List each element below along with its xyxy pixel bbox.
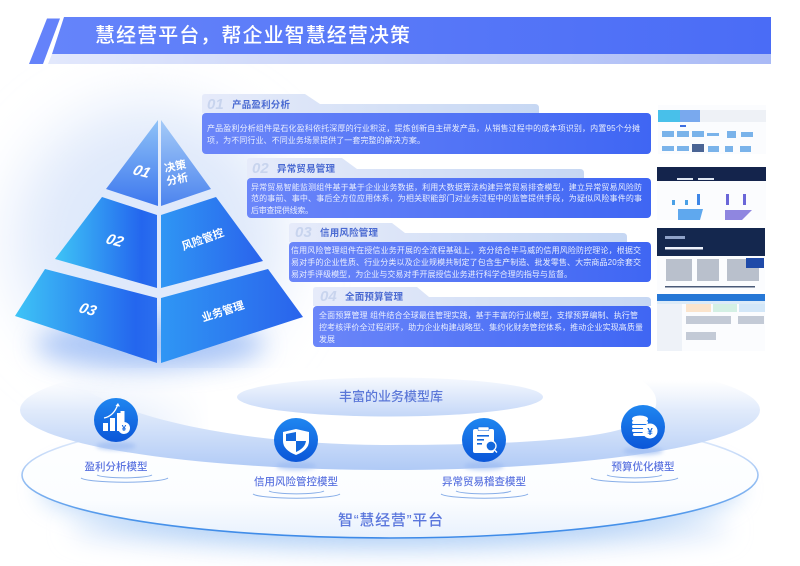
tier labels: 决策 <box>163 157 187 175</box>
panel: 全面预算管理: 04 <box>320 288 337 305</box>
panel: 异常贸易管理: 02 <box>252 160 269 177</box>
top ellipse: model library: 丰富的业务模型库 <box>339 389 443 404</box>
tier labels: 分析 <box>165 170 189 188</box>
screenshot 4 <box>657 294 765 351</box>
title: 慧经营平台，帮企业智慧经营决策 <box>95 24 410 47</box>
label: 预算优化模型: 预算优化模型 <box>612 460 674 473</box>
tier labels: 风险管控 <box>180 225 226 253</box>
label: 信用风险管控模型: 信用风险管控模型 <box>254 475 338 488</box>
panel: 全面预算管理: 全面预算管理 <box>345 291 403 303</box>
panel: 信用风险管理: 易对手评级模型，为企业与交易对手开展授信业务进行科学合理的指导与监督。 <box>291 269 572 279</box>
panel: 产品盈利分析: 项，为不同行业、不同业务场景提供了一套完整的解决方案。 <box>207 135 425 145</box>
icon: shield <box>274 418 318 470</box>
label: 盈利分析模型: 盈利分析模型 <box>84 460 148 473</box>
panel: 信用风险管理: 03 <box>295 224 312 241</box>
label: 预算优化模型 <box>591 460 678 482</box>
screenshot 2 <box>657 167 766 220</box>
panel: 异常贸易管理: 异常贸易管理 <box>277 163 335 175</box>
tier numbers: 02 <box>103 231 127 251</box>
icon: audit report <box>462 418 506 470</box>
panel: 产品盈利分析: 产品盈利分析 <box>232 99 290 111</box>
tier numbers <box>76 162 153 320</box>
upper platform ring <box>20 350 760 470</box>
background glow <box>15 105 730 552</box>
panel: 全面预算管理: 全面预算管理 组件结合全球最佳管理实践，基于丰富的行业模型，支撑预算编制、执行管 <box>319 310 638 320</box>
panel: 信用风险管理 <box>289 223 651 282</box>
label: 异常贸易稽查模型: 异常贸易稽查模型 <box>442 475 526 488</box>
panel: 信用风险管理: 信用风险管理 <box>320 227 378 239</box>
panel: 全面预算管理 <box>313 287 651 347</box>
platform title: 智“慧经营”平台 <box>338 511 443 529</box>
label: 盈利分析模型 <box>81 460 168 482</box>
icon: budget coins: ¥ <box>647 427 653 438</box>
top ellipse: model library <box>237 378 543 416</box>
panel: 产品盈利分析: 01 <box>207 96 224 113</box>
tier labels <box>163 157 246 325</box>
panel: 全面预算管理: 控考核评价全过程闭环，助力企业构建战略型、集约化财务管控体系，推动企业实现高质量 <box>319 322 643 332</box>
tier numbers: 01 <box>130 162 153 182</box>
screenshot 1 <box>658 105 766 154</box>
tier numbers: 03 <box>76 300 100 320</box>
panel: 产品盈利分析 <box>202 94 651 154</box>
lower platform base <box>22 412 758 544</box>
panel: 信用风险管理: 易对手的企业性质、行业分类以及企业规模共制定了包含生产制造、批发零售、大宗商品20余套交 <box>291 257 641 267</box>
label: 异常贸易稽查模型 <box>441 475 528 498</box>
tier labels: 业务管理 <box>200 298 246 325</box>
pyramid <box>15 120 303 369</box>
screenshot 3 <box>657 228 765 290</box>
panel: 异常贸易管理 <box>247 158 651 218</box>
panel: 产品盈利分析: 产品盈利分析组件是石化盈科依托深厚的行业积淀，提炼创新自主研发产品，从销售过程中的成本项识别，内置95个分摊 <box>207 123 640 133</box>
label: 信用风险管控模型 <box>253 475 340 498</box>
panel: 异常贸易管理: 范的事前、事中、事后全方位应用体系，为相关职能部门对业务过程中的监管提供手段，为疑似风险事件的事 <box>251 193 642 203</box>
icon: budget coins <box>621 405 665 455</box>
panel: 异常贸易管理: 后审查提供线索。 <box>251 205 313 215</box>
icon: profit analysis <box>94 398 138 450</box>
icon: profit analysis: ¥ <box>122 424 127 433</box>
header banner <box>29 17 771 64</box>
panel: 信用风险管理: 信用风险管理组件在授信业务开展的全流程基础上，充分结合毕马威的信用风险防控理论，根据交 <box>291 245 641 255</box>
panel: 全面预算管理: 发展 <box>319 334 335 344</box>
panel: 异常贸易管理: 异常贸易智能监测组件基于基于企业业务数据，利用大数据算法构建异常贸易排查模型，建立异常贸易风险防 <box>251 182 642 192</box>
